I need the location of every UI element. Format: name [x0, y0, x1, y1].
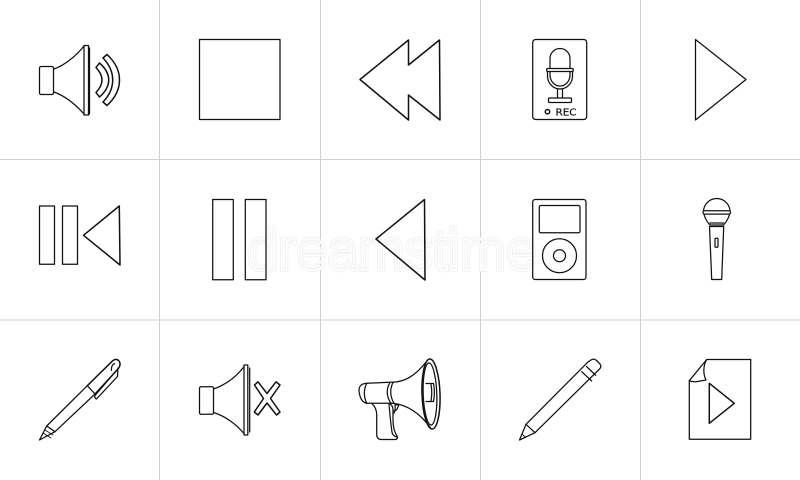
icon: microphone record card: REC: [556, 108, 577, 118]
icon: pause: [213, 200, 266, 280]
icon: music player: [533, 200, 586, 280]
icon: speaker with sound waves: [40, 46, 120, 115]
icon: ballpoint pen: [40, 359, 120, 440]
icon: skip to start: [40, 206, 120, 265]
watermark: dreamstime: [247, 218, 537, 283]
icon: handheld microphone: [703, 199, 730, 280]
icon: play file: [689, 360, 751, 439]
icon: back triangle: [376, 200, 425, 280]
icon: stop square: [200, 40, 280, 120]
icon: play triangle: [696, 40, 746, 120]
icon: muted speaker: [200, 365, 280, 435]
icon: pencil: [520, 359, 601, 440]
icon: megaphone: [359, 359, 441, 440]
icon: microphone record card: [533, 40, 587, 120]
watermark: dreamstime: [247, 218, 537, 283]
icon: rewind: [360, 40, 440, 120]
